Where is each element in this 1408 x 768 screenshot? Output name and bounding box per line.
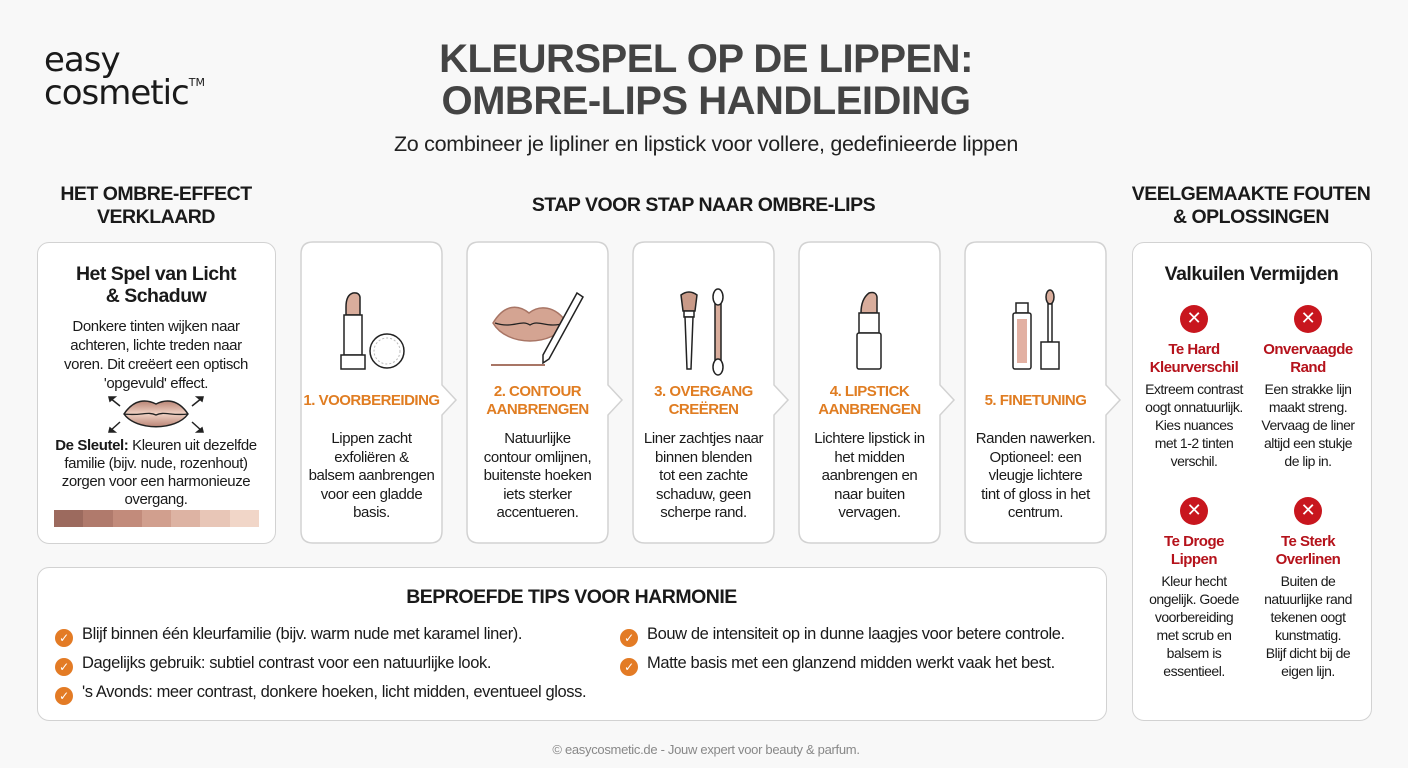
mistake 4: Buiten de xyxy=(1281,573,1335,589)
step description: binnen blenden xyxy=(655,448,752,466)
mistake 1: Extreem contrast xyxy=(1145,381,1243,397)
step description: het midden xyxy=(834,448,905,466)
title xyxy=(439,37,973,123)
step 2 xyxy=(484,292,591,521)
step title xyxy=(818,383,921,418)
mistake 3: met scrub en xyxy=(1157,627,1231,643)
step title: 3. OVERGANG xyxy=(654,383,753,400)
mistake 2: Vervaag de liner xyxy=(1261,417,1355,433)
tip 4: Bouw de intensiteit op in dunne laagjes voor betere controle. xyxy=(647,625,1065,643)
step description: exfoliëren & xyxy=(334,448,409,466)
mistake 3: balsem is xyxy=(1167,645,1221,661)
mistake 3: Lippen xyxy=(1171,551,1217,568)
tip 2: Dagelijks gebruik: subtiel contrast voor een natuurlijke look. xyxy=(82,654,491,672)
panel heading: Valkuilen Vermijden xyxy=(1165,263,1338,285)
tip 4: ✓ xyxy=(624,631,634,645)
mistake 4: ✕ xyxy=(1301,500,1315,521)
mistake 3: voorbereiding xyxy=(1155,609,1233,625)
step description: contour omlijnen, xyxy=(484,448,591,466)
tip 1: ✓ xyxy=(59,631,69,645)
step title: AANBRENGEN xyxy=(818,401,921,418)
mistake 4: eigen lijn. xyxy=(1281,663,1335,679)
step description xyxy=(309,430,434,521)
mistake 4: natuurlijke rand xyxy=(1264,591,1352,607)
step title: 2. CONTOUR xyxy=(494,383,581,400)
heading: mistakes: VEELGEMAAKTE FOUTEN xyxy=(1132,183,1370,205)
icon: lips with arrows xyxy=(108,396,204,433)
key text: zorgen voor een harmonieuze xyxy=(62,473,250,490)
icon: lipstick xyxy=(856,292,882,370)
mistake 4: tekenen oogt xyxy=(1271,609,1345,625)
panel: tips xyxy=(37,567,1107,721)
mistake 1: ✕ xyxy=(1187,308,1201,329)
step description: scherpe rand. xyxy=(660,504,747,521)
step description xyxy=(976,430,1095,521)
mistake 4: Te Sterk xyxy=(1281,533,1335,550)
mistake 4: kunstmatig. xyxy=(1275,627,1341,643)
step description: centrum. xyxy=(1008,504,1063,521)
heading: steps: STAP VOOR STAP NAAR OMBRE-LIPS xyxy=(532,194,875,216)
footer: © easycosmetic.de - Jouw expert voor beauty & parfum. xyxy=(552,742,860,757)
step description: Liner zachtjes naar xyxy=(644,430,763,447)
title: KLEURSPEL OP DE LIPPEN: xyxy=(439,37,973,81)
mistake 2: de lip in. xyxy=(1284,453,1332,469)
mistake 1 xyxy=(1145,305,1244,469)
step description: vervagen. xyxy=(838,504,901,521)
mistake 3: essentieel. xyxy=(1163,663,1225,679)
step title: AANBRENGEN xyxy=(486,401,589,418)
logo: easy xyxy=(44,40,120,80)
panel heading xyxy=(76,263,236,307)
step description: schaduw, geen xyxy=(656,486,751,502)
colour swatch bar xyxy=(54,510,259,527)
heading: ombre effect: HET OMBRE-EFFECT xyxy=(60,183,252,205)
mistake 1: Kleurverschil xyxy=(1150,359,1238,376)
key text: familie (bijv. nude, rozenhout) xyxy=(64,455,248,472)
step title: 4. LIPSTICK xyxy=(830,383,909,400)
step description: Lippen zacht xyxy=(331,430,412,447)
mistake 4: Blijf dicht bij de xyxy=(1266,645,1350,661)
panel: mistakes xyxy=(1132,242,1372,721)
step description: basis. xyxy=(353,504,390,521)
step description: Natuurlijke xyxy=(504,430,571,447)
icon: lip gloss xyxy=(1012,289,1060,370)
step description xyxy=(814,430,925,521)
heading: ombre effect xyxy=(60,183,252,228)
mistake 3: Te Droge xyxy=(1164,533,1224,550)
step description: iets sterker xyxy=(503,486,572,502)
mistake 2: ✕ xyxy=(1301,308,1315,329)
key text: overgang. xyxy=(124,491,188,508)
step description: naar buiten xyxy=(834,486,905,502)
step description: Randen nawerken. xyxy=(976,430,1095,447)
step description xyxy=(644,430,764,521)
step description xyxy=(484,430,591,521)
subtitle: Zo combineer je lipliner en lipstick voor vollere, gedefinieerde lippen xyxy=(394,132,1018,156)
step description: buitenste hoeken xyxy=(484,467,591,484)
step description: aanbrengen en xyxy=(822,467,917,484)
step title: CREËREN xyxy=(669,401,738,418)
tips heading: BEPROEFDE TIPS VOOR HARMONIE xyxy=(406,586,737,608)
step 3 xyxy=(644,288,764,521)
step 1 xyxy=(303,292,440,521)
mistake 2: Een strakke lijn xyxy=(1265,381,1351,397)
step description: tot een zachte xyxy=(659,467,748,484)
mistake 2: Rand xyxy=(1290,359,1326,376)
explanation text: 'opgevuld' effect. xyxy=(104,375,208,392)
step description: accentueren. xyxy=(497,504,578,521)
panel heading: & Schaduw xyxy=(106,285,206,307)
step description: Lichtere lipstick in xyxy=(814,430,925,447)
step 5 xyxy=(976,289,1095,521)
tip 3: ✓ xyxy=(59,689,69,703)
tip 2: ✓ xyxy=(59,660,69,674)
icon: lips and liner pencil xyxy=(491,292,584,366)
logo: cosmeticTM xyxy=(44,73,205,113)
step title xyxy=(654,383,753,418)
icon: brush and cotton swab xyxy=(680,288,724,376)
explanation text xyxy=(64,318,248,392)
mistake 2: Onvervaagde xyxy=(1263,341,1353,358)
step title: 1. VOORBEREIDING xyxy=(303,392,440,409)
step title xyxy=(486,383,589,418)
mistake 4 xyxy=(1264,497,1352,679)
step description: voor een gladde xyxy=(321,486,422,502)
heading: ombre effect: VERKLAARD xyxy=(97,206,215,228)
heading: mistakes xyxy=(1132,183,1370,228)
icon: lipstick and cotton pad xyxy=(340,292,405,370)
mistake 1: met 1-2 tinten xyxy=(1155,435,1233,451)
step description: vleugje lichtere xyxy=(989,467,1082,484)
title: OMBRE-LIPS HANDLEIDING xyxy=(442,79,970,123)
mistake 3: ✕ xyxy=(1187,500,1201,521)
mistake 2: altijd een stukje xyxy=(1264,435,1352,451)
mistake 2: maakt streng. xyxy=(1269,399,1347,415)
tip 3: 's Avonds: meer contrast, donkere hoeken, licht midden, eventueel gloss. xyxy=(82,683,586,701)
explanation text: Donkere tinten wijken naar xyxy=(72,318,240,335)
logo xyxy=(44,40,205,113)
tip 5: ✓ xyxy=(624,660,634,674)
mistake 1: verschil. xyxy=(1171,453,1217,469)
step description: balsem aanbrengen xyxy=(309,467,434,484)
explanation text: voren. Dit creëert een optisch xyxy=(64,356,248,373)
panel heading: Het Spel van Licht xyxy=(76,263,236,285)
key text xyxy=(55,437,257,508)
tip 1: Blijf binnen één kleurfamilie (bijv. warm nude met karamel liner). xyxy=(82,625,522,643)
mistake 3 xyxy=(1149,497,1239,679)
panel: ombre effect xyxy=(37,242,276,544)
mistake 1: Kies nuances xyxy=(1155,417,1233,433)
mistake 3: Kleur hecht xyxy=(1161,573,1227,589)
step title: 5. FINETUNING xyxy=(985,392,1086,409)
step description: Optioneel: een xyxy=(990,448,1081,466)
mistake 1: oogt onnatuurlijk. xyxy=(1145,399,1243,415)
tip 5: Matte basis met een glanzend midden werkt vaak het best. xyxy=(647,654,1055,672)
key text: De Sleutel: Kleuren uit dezelfde xyxy=(55,437,257,454)
step 4 xyxy=(814,292,925,521)
mistake 3: ongelijk. Goede xyxy=(1149,591,1239,607)
mistake 4: Overlinen xyxy=(1276,551,1340,568)
mistake 1: Te Hard xyxy=(1168,341,1220,358)
heading: mistakes: & OPLOSSINGEN xyxy=(1173,206,1329,228)
explanation text: achteren, lichte treden naar xyxy=(70,337,242,354)
mistake 2 xyxy=(1261,305,1355,469)
step description: tint of gloss in het xyxy=(981,486,1090,502)
